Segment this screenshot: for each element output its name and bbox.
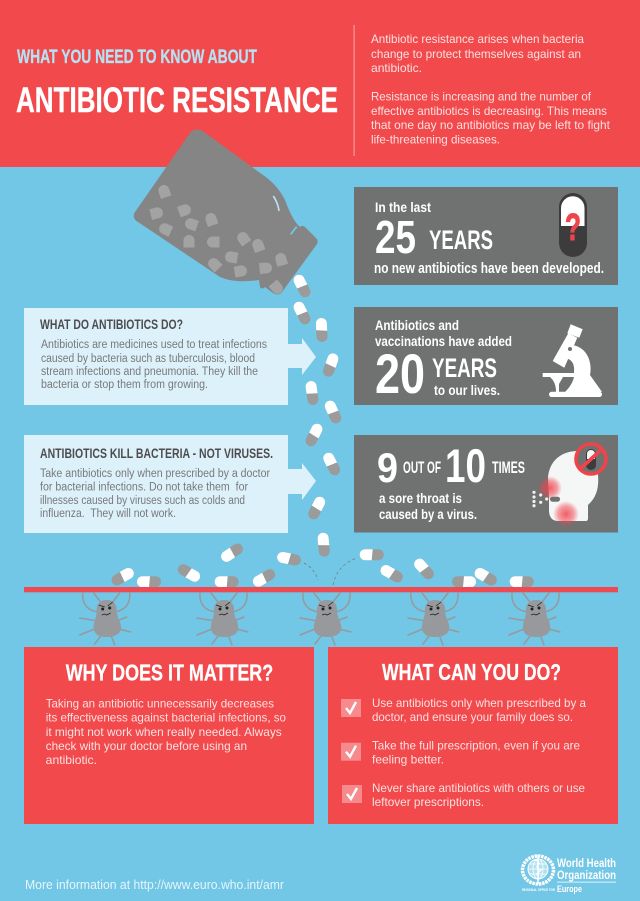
header intro text: effective antibiotics is decreasing. This means (371, 104, 607, 118)
body text: why does it matter (46, 697, 286, 767)
WHO logo: REGIONAL OFFICE FOR (522, 888, 555, 892)
heading: what can you do: WHAT CAN YOU DO? (382, 659, 561, 685)
icon: head with sore throat (532, 451, 598, 527)
body text: what do antibiotics do: bacteria or stop them from growing. (41, 379, 208, 391)
icon: no pill sign (576, 444, 606, 474)
falling pills column (292, 273, 343, 557)
icon: question mark capsule (559, 193, 587, 257)
checklist item 1 (341, 696, 586, 724)
WHO logo: Organization (557, 868, 616, 882)
header intro text: life-threatening diseases. (371, 132, 500, 146)
body text: why does it matter: its effectiveness against bacterial infections, so (46, 711, 286, 725)
panel: what do antibiotics do (24, 308, 316, 405)
heading: antibiotics kill bacteria: ANTIBIOTICS KILL BACTERIA - NOT VIRUSES. (40, 445, 273, 461)
panel: 25 years: YEARS (429, 225, 493, 255)
body text: why does it matter: antibiotic. (46, 753, 97, 767)
red barrier bar (24, 587, 618, 592)
body text: antibiotics kill bacteria: illnesses caused by viruses such as colds and (40, 495, 245, 507)
body text: antibiotics kill bacteria: for bacterial infections. Do not take them for (40, 482, 248, 494)
bacteria row (80, 593, 560, 645)
checklist item 2: Take the full prescription, even if you are (372, 739, 580, 753)
checklist item 3: leftover prescriptions. (372, 795, 484, 809)
body text: what do antibiotics do (41, 339, 267, 391)
body text: why does it matter: Taking an antibiotic unnecessarily decreases (46, 697, 274, 711)
panel: 9 out of 10: TIMES (492, 458, 525, 477)
panel: 20 years: YEARS (432, 353, 497, 383)
header intro text: antibiotic. (371, 61, 422, 75)
panel: 20 years: to our lives. (434, 382, 500, 398)
checklist item 2 (341, 739, 580, 767)
body text: antibiotics kill bacteria: influenza. They will not work. (40, 508, 176, 520)
header intro text (371, 32, 611, 146)
WHO logo: World Health (557, 856, 616, 870)
panel: 25 years: 25 (375, 211, 416, 263)
checklist item 1: doctor, and ensure your family does so. (372, 710, 573, 724)
panel: 25 years: In the last (375, 199, 431, 215)
panel: why does it matter (24, 647, 314, 824)
panel: 9 out of 10: caused by a virus. (379, 506, 477, 522)
header panel (0, 0, 640, 167)
header intro text: that one day no antibiotics may be left to fight (371, 118, 611, 132)
checklist item 1: Use antibiotics only when prescribed by a (372, 696, 586, 710)
body text: why does it matter: it might not work when really needed. Always (46, 725, 282, 739)
icon: question mark capsule: ? (565, 207, 581, 249)
heading: what do antibiotics do: WHAT DO ANTIBIOTICS DO? (40, 316, 183, 332)
checklist item 2: feeling better. (372, 753, 444, 767)
WHO logo: Europe (557, 884, 582, 895)
footer link text: More information at http://www.euro.who.int/amr (25, 878, 284, 892)
panel: 20 years (354, 307, 618, 405)
panel: antibiotics kill bacteria (24, 435, 316, 533)
body text: antibiotics kill bacteria: Take antibiotics only when prescribed by a doctor (40, 468, 270, 480)
body text: what do antibiotics do: Antibiotics are medicines used to treat infections (41, 339, 267, 351)
header kicker: WHAT YOU NEED TO KNOW ABOUT (17, 47, 257, 68)
icon: tipped pill bottle (134, 129, 318, 296)
header intro text: change to protect themselves against an (371, 47, 581, 61)
icon: WHO emblem (522, 855, 554, 884)
checklist item 3 (342, 781, 585, 809)
body text: antibiotics kill bacteria (40, 468, 270, 520)
header intro text: Resistance is increasing and the number of (371, 90, 592, 104)
panel: 9 out of 10: OUT OF (403, 458, 441, 477)
panel: 9 out of 10: a sore throat is (379, 490, 462, 506)
heading: why does it matter: WHY DOES IT MATTER? (66, 660, 273, 686)
body text: what do antibiotics do: caused by bacteria such as tuberculosis, blood (41, 353, 255, 365)
body text: what do antibiotics do: stream infections and pneumonia. They kill the (41, 366, 258, 378)
panel: 25 years (354, 187, 618, 285)
panel: what can you do (328, 647, 618, 824)
panel: 9 out of 10 (354, 435, 618, 532)
body text: why does it matter: check with your doctor before using an (46, 739, 247, 753)
icon: microscope (543, 324, 602, 397)
bouncing pills (110, 541, 534, 589)
panel: 9 out of 10: 9 (377, 444, 398, 491)
panel: 20 years: Antibiotics and (375, 317, 459, 333)
panel: 20 years: 20 (375, 342, 425, 405)
panel: 9 out of 10: 10 (445, 439, 486, 492)
main title: ANTIBIOTIC RESISTANCE (16, 81, 338, 120)
header intro text: Antibiotic resistance arises when bacteria (371, 32, 584, 46)
panel: 20 years: vaccinations have added (375, 333, 512, 349)
WHO logo (522, 855, 616, 895)
checklist item 3: Never share antibiotics with others or use (372, 781, 585, 795)
